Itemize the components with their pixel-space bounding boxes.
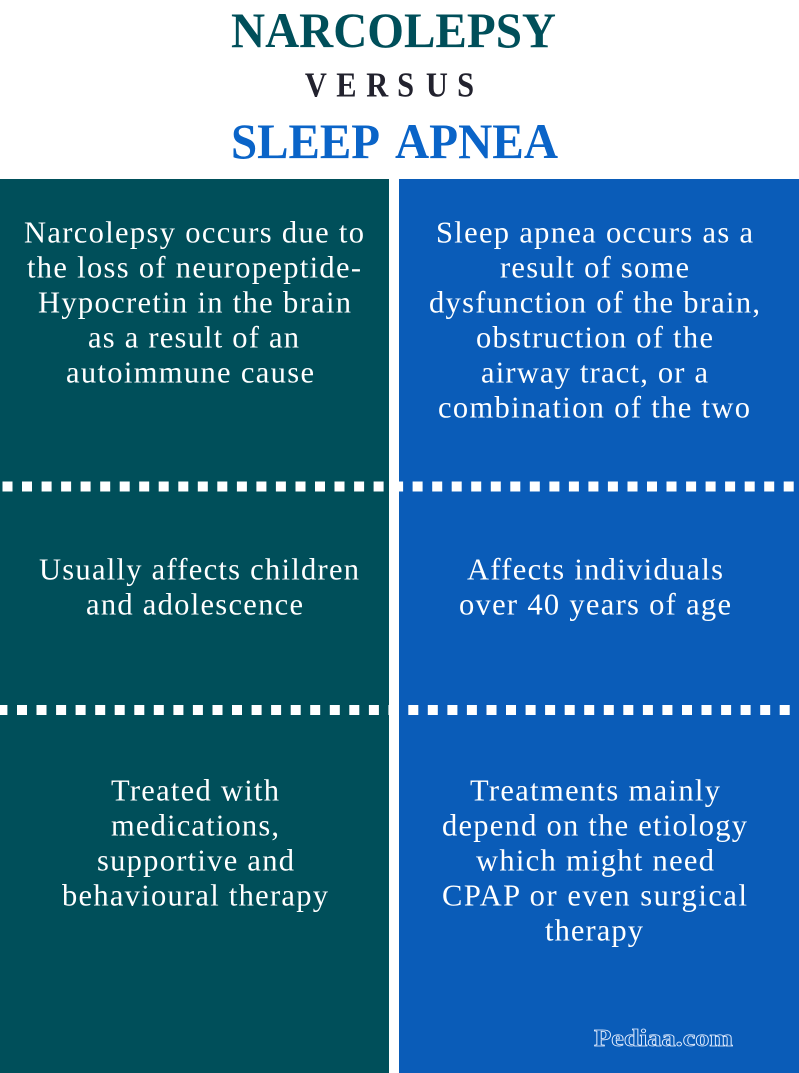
text: narcolepsy treatment: medications, [111,808,279,842]
panel: narcolepsy column [0,179,389,1073]
text: sleep apnea cause: result of some [500,250,689,284]
text: narcolepsy cause: Narcolepsy occurs due to [24,216,364,250]
text: narcolepsy cause [24,216,364,390]
text: sleep apnea treatment: depend on the etiology [442,808,748,842]
title: narcolepsy: NARCOLEPSY [231,2,556,58]
text: narcolepsy treatment: Treated with [111,774,279,808]
text: sleep apnea cause [429,216,760,424]
text: sleep apnea treatment [442,774,748,948]
text: narcolepsy affected group: and adolescence [86,588,303,622]
text: narcolepsy cause: Hypocretin in the brain [38,286,351,320]
dotted divider: row two [0,705,790,715]
text: narcolepsy affected group [39,552,359,622]
text: sleep apnea cause: combination of the two [438,390,750,424]
text: sleep apnea affected group [459,552,731,622]
text: sleep apnea treatment: Treatments mainly [470,774,721,808]
panel: sleep apnea column [399,179,799,1073]
heading: versus: VERSUS [305,67,474,105]
dotted divider: row one [2,482,794,492]
text: sleep apnea affected group: over 40 years of age [459,588,731,622]
text: narcolepsy affected group: Usually affects children [39,552,359,586]
text: sleep apnea affected group: Affects individuals [467,552,723,586]
text: sleep apnea treatment: which might need [476,844,714,878]
text: narcolepsy cause: autoimmune cause [66,356,314,390]
title: sleep apnea [231,113,558,169]
text: narcolepsy treatment [62,774,329,912]
text: sleep apnea cause: airway tract, or a [481,356,708,390]
text: narcolepsy cause: as a result of an [88,320,299,354]
logo: Pediaa.com: Pediaa.com [594,1026,733,1052]
text: narcolepsy cause: the loss of neuropeptide- [27,250,361,284]
title: sleep apnea: SLEEP [231,113,380,169]
text: narcolepsy treatment: supportive and [97,844,294,878]
text: sleep apnea cause: dysfunction of the brain, [429,286,760,320]
text: narcolepsy treatment: behavioural therapy [62,878,329,912]
text: sleep apnea cause: Sleep apnea occurs as a [436,216,753,250]
text: sleep apnea treatment: therapy [545,914,644,948]
text: sleep apnea cause: obstruction of the [476,320,713,354]
title: sleep apnea: APNEA [395,113,558,169]
text: sleep apnea treatment: CPAP or even surgical [442,878,747,912]
